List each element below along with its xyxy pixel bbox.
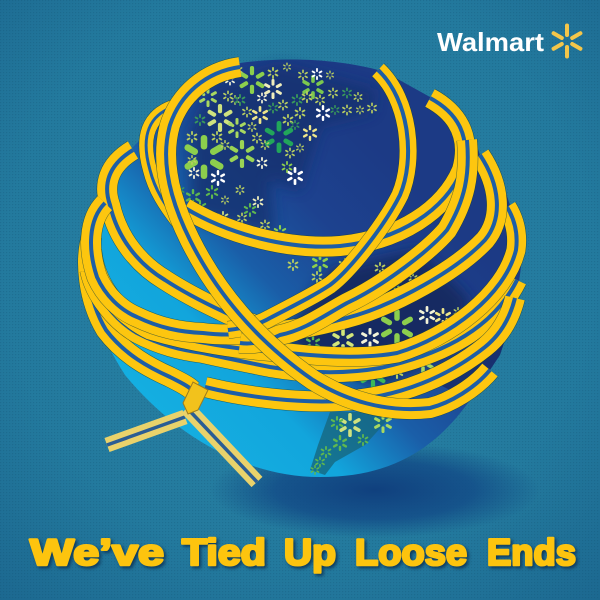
sparks: middle continent <box>287 254 463 389</box>
ribbon: top loop <box>166 67 490 409</box>
knot and loose ends <box>107 382 257 482</box>
sparks: south america <box>310 413 392 475</box>
ribbon: horizontal top band <box>185 98 465 247</box>
ribbons wrapped around the globe <box>88 67 517 409</box>
ribbon: second tier <box>107 150 275 332</box>
walmart logo <box>437 24 583 58</box>
title <box>30 532 576 573</box>
ribbon: lower band <box>90 270 517 372</box>
title: Loose <box>355 532 467 573</box>
ribbon: knot band right <box>205 298 515 401</box>
title: Tied <box>182 532 266 573</box>
title: Up <box>284 532 336 573</box>
title: Ends <box>487 532 576 573</box>
ribbon: upper wide band <box>91 155 497 335</box>
ribbon: diagonal from top <box>228 70 408 330</box>
globe shadow <box>210 442 540 538</box>
continent: south america shade <box>310 412 395 475</box>
continent: north america shade <box>190 65 375 235</box>
ribbon: upper-left short tier <box>146 107 178 222</box>
loose end: left <box>107 417 185 445</box>
sparks: top continent <box>175 62 377 239</box>
globe body <box>85 60 522 477</box>
loose end: right <box>187 408 257 482</box>
ribbon: middle band <box>92 207 517 357</box>
knot <box>183 382 208 414</box>
title: We’ve <box>30 532 164 573</box>
ribbon: diagonal from right <box>240 140 468 343</box>
spark icon <box>551 24 583 58</box>
globe <box>85 60 522 477</box>
ribbon: left band to knot <box>88 235 192 390</box>
continent: middle land shade <box>285 250 470 385</box>
wordmark: Walmart <box>437 27 544 57</box>
right-side dark shading <box>440 310 515 400</box>
